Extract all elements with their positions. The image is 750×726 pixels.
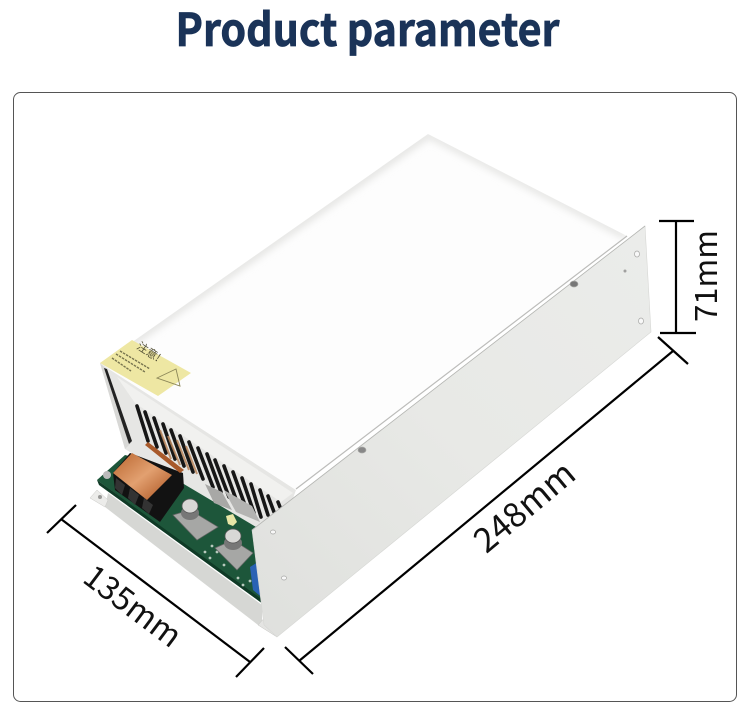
front panel with vents: [100, 363, 296, 540]
yellow capacitor: [226, 514, 237, 526]
dimension: length 248mm: [285, 337, 688, 674]
screw terminal upper: [173, 499, 218, 540]
top edge highlight: [252, 226, 645, 530]
terminal block: [103, 442, 184, 522]
blue potentiometer: [250, 562, 266, 600]
base flange: [90, 490, 280, 637]
dimension: width 135mm: [47, 505, 264, 677]
dimension: height 71mm: 71mm: [681, 230, 726, 322]
power supply unit: [90, 134, 651, 637]
mounting holes: [270, 251, 644, 580]
warning label: [100, 338, 191, 396]
top cover: [101, 134, 627, 490]
dimension: height 71mm: [659, 221, 726, 333]
circuit board: [97, 455, 295, 607]
side panel: [252, 226, 651, 637]
warning label: 注意!: [134, 338, 164, 365]
dimension: length 248mm: 248mm: [461, 448, 584, 562]
screw terminal lower: [215, 529, 253, 570]
dimension: width 135mm: 135mm: [75, 552, 193, 657]
